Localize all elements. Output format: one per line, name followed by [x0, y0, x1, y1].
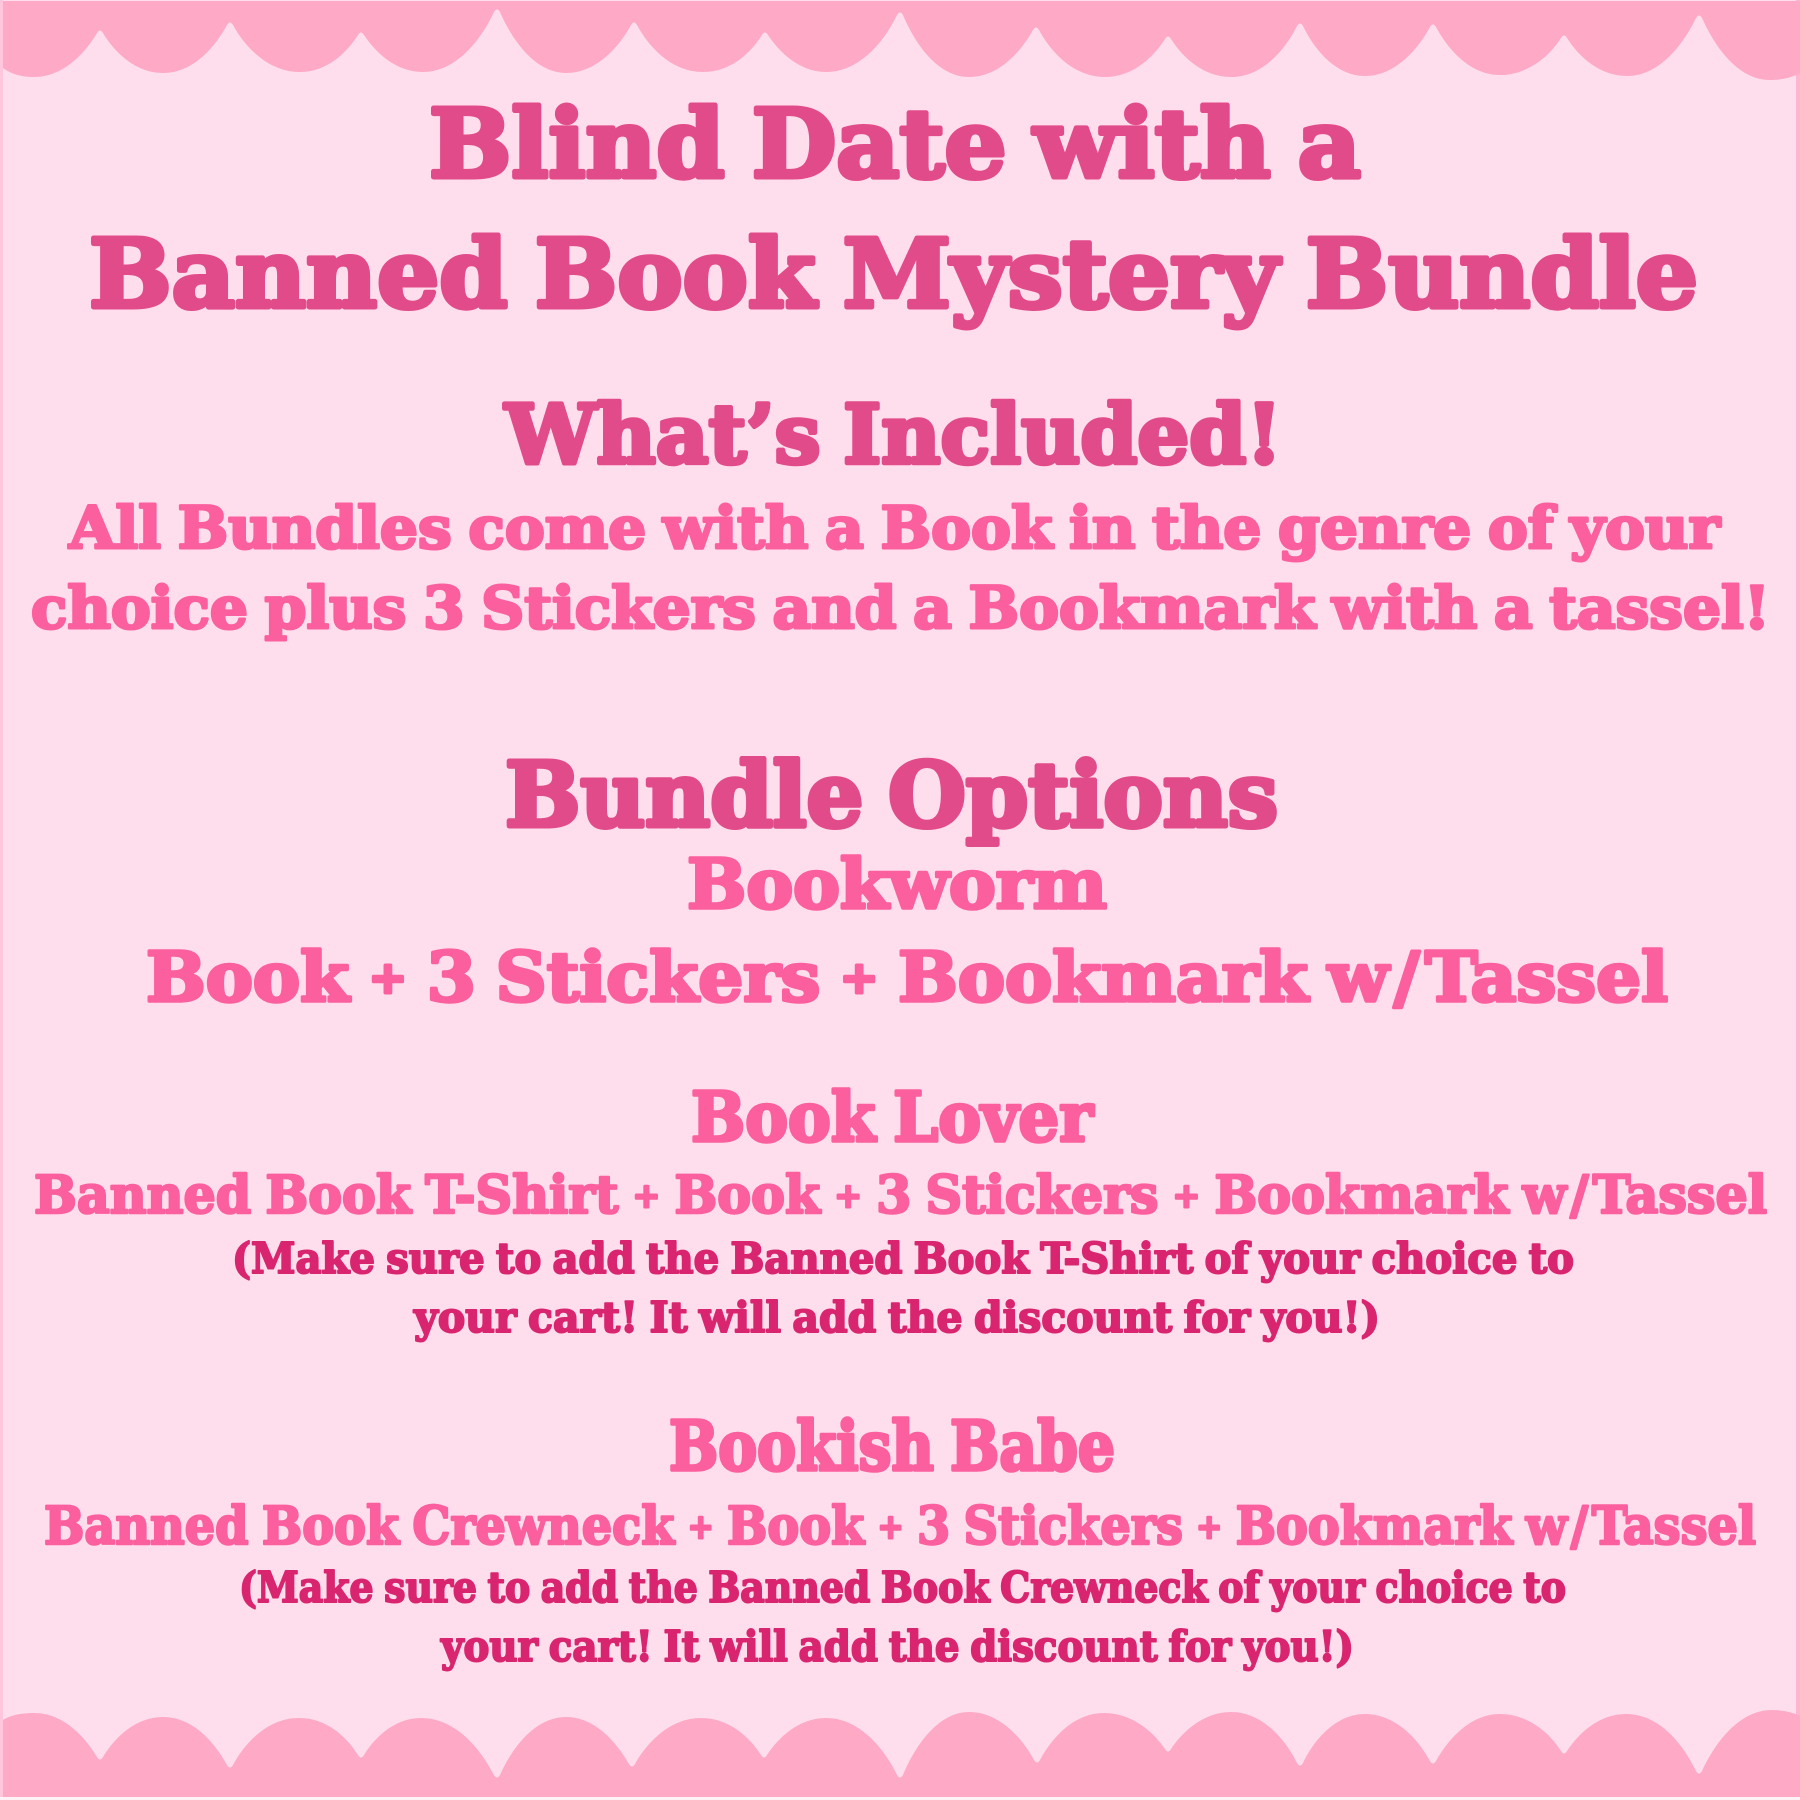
description text line 2: choice plus 3 Stickers and a Bookmark with a tassel! — [31, 574, 1770, 642]
book lover note line 2: your cart! It will add the discount for you!) — [413, 1293, 1380, 1342]
book lover contents: Banned Book T-Shirt + Book + 3 Stickers + Bookmark w/Tassel — [34, 1165, 1767, 1226]
title line 2: Banned Book Mystery Bundle — [89, 219, 1698, 330]
option: book lover — [34, 1078, 1767, 1342]
title block — [89, 89, 1698, 330]
bookish babe note line 1: (Make sure to add the Banned Book Crewneck of your choice to — [239, 1563, 1566, 1612]
description text line 1: All Bundles come with a Book in the genre of your — [68, 494, 1721, 562]
heading: what's included: What’s Included! — [504, 388, 1282, 483]
bookish babe note line 2: your cart! It will add the discount for you!) — [440, 1622, 1354, 1671]
what's included section — [31, 388, 1770, 642]
bookworm contents: Book + 3 Stickers + Bookmark w /Tassel — [146, 938, 1668, 1018]
option: bookish babe — [44, 1407, 1756, 1671]
bundle options section — [34, 742, 1767, 1671]
bookish babe name: Bookish Babe — [669, 1407, 1115, 1487]
bookish babe contents: Banned Book Crewneck + Book + 3 Stickers + Bookmark w/Tassel — [44, 1496, 1756, 1557]
book lover name: Book Lover — [691, 1078, 1094, 1158]
bottom scalloped border — [3, 1710, 1800, 1797]
option: bookworm — [146, 845, 1668, 1018]
bookworm name: Bookworm — [687, 845, 1107, 925]
heading: bundle options: Bundle Options — [505, 742, 1278, 847]
title line 1: Blind Date with a — [429, 89, 1361, 200]
book lover note line 1: (Make sure to add the Banned Book T-Shirt of your choice to — [232, 1234, 1574, 1283]
top scalloped border — [3, 1, 1800, 80]
